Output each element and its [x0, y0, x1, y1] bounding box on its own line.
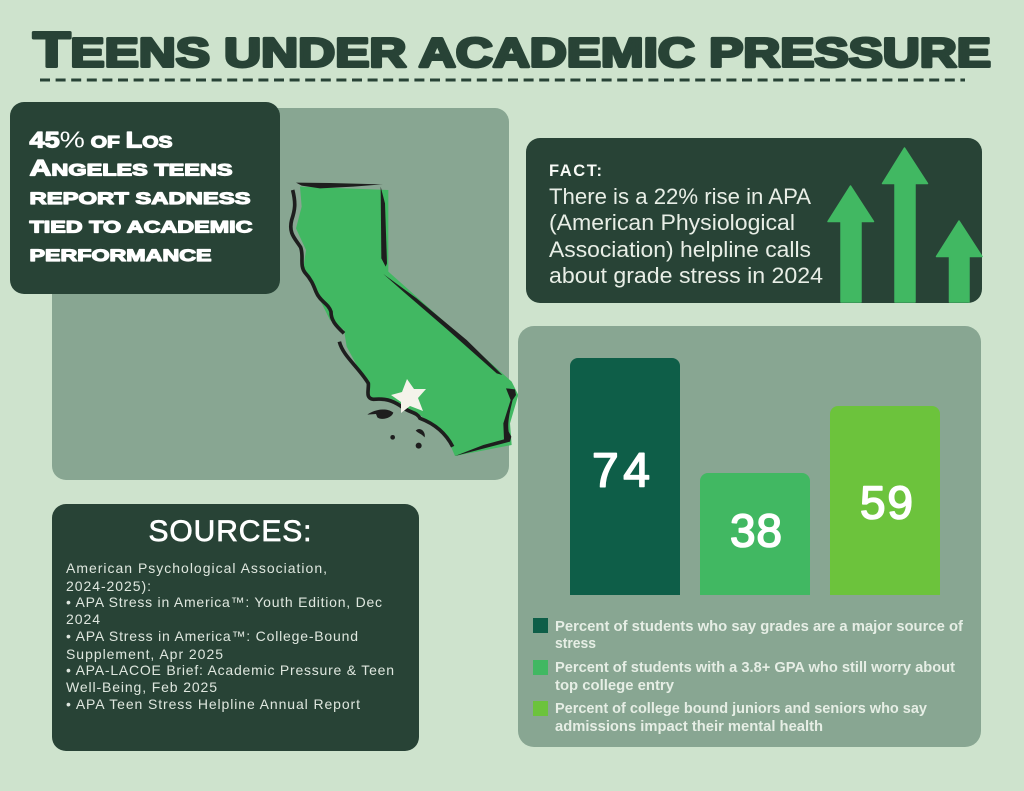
legend: Percent of students who say grades are a major source of: [555, 619, 963, 635]
fact text: There is a 22% rise in APA: [549, 184, 811, 209]
legend: admissions impact their mental health: [555, 719, 823, 735]
sources list: • APA Stress in America™: Youth Edition, Dec: [66, 594, 382, 610]
callout: 45% statistic: TIED TO ACADEMIC: [30, 218, 252, 236]
legend: top college entry: [555, 678, 674, 694]
sources list: • APA-LACOE Brief: Academic Pressure & Teen: [66, 662, 394, 678]
callout: 45% statistic: PERFORMANCE: [30, 246, 212, 265]
fact text: [549, 162, 823, 288]
sources list: Supplement, Apr 2025: [66, 646, 223, 662]
fact text: FACT:: [549, 162, 602, 180]
panel: sources: [52, 504, 419, 751]
fact text: Association) helpline calls: [549, 237, 811, 262]
bar: 38: [700, 473, 810, 595]
sources heading: SOURCES:: [148, 515, 312, 548]
fact text: about grade stress in 2024: [549, 263, 823, 288]
title: TEENS UNDER ACADEMIC PRESSURE: [33, 24, 991, 78]
sources list: [66, 560, 394, 712]
legend: [533, 618, 963, 735]
fact text: (American Physiological: [549, 210, 795, 235]
sources list: 2024-2025):: [66, 578, 151, 594]
bar: 59: [830, 406, 940, 595]
icon: rising arrows: [828, 148, 982, 302]
sources list: • APA Teen Stress Helpline Annual Report: [66, 696, 360, 712]
bar: 74: [570, 358, 680, 595]
callout: 45% statistic: A NGELES TEENS: [30, 156, 232, 180]
bar: 38: 38: [730, 504, 782, 556]
legend: Percent of college bound juniors and seniors who say: [555, 701, 927, 717]
sources list: 2024: [66, 611, 100, 627]
callout: 45% statistic: 45% OF LOS: [30, 126, 172, 152]
bar: 59: 59: [860, 476, 913, 528]
sources list: • APA Stress in America™: College-Bound: [66, 628, 358, 644]
legend: Percent of students with a 3.8+ GPA who still worry about: [555, 660, 955, 676]
panel: fact: [526, 138, 982, 303]
sources list: American Psychological Association,: [66, 560, 327, 576]
panel: California map: [52, 108, 518, 480]
bar: 74: 74: [592, 444, 650, 498]
sources list: Well-Being, Feb 2025: [66, 679, 217, 695]
callout: 45% statistic: [10, 102, 280, 294]
legend: stress: [555, 636, 596, 652]
map: California outline: [291, 183, 518, 456]
icon: star marking Los Angeles: [391, 379, 426, 413]
callout: 45% statistic: REPORT SADNESS: [30, 189, 250, 208]
panel: bar chart: [518, 326, 981, 747]
